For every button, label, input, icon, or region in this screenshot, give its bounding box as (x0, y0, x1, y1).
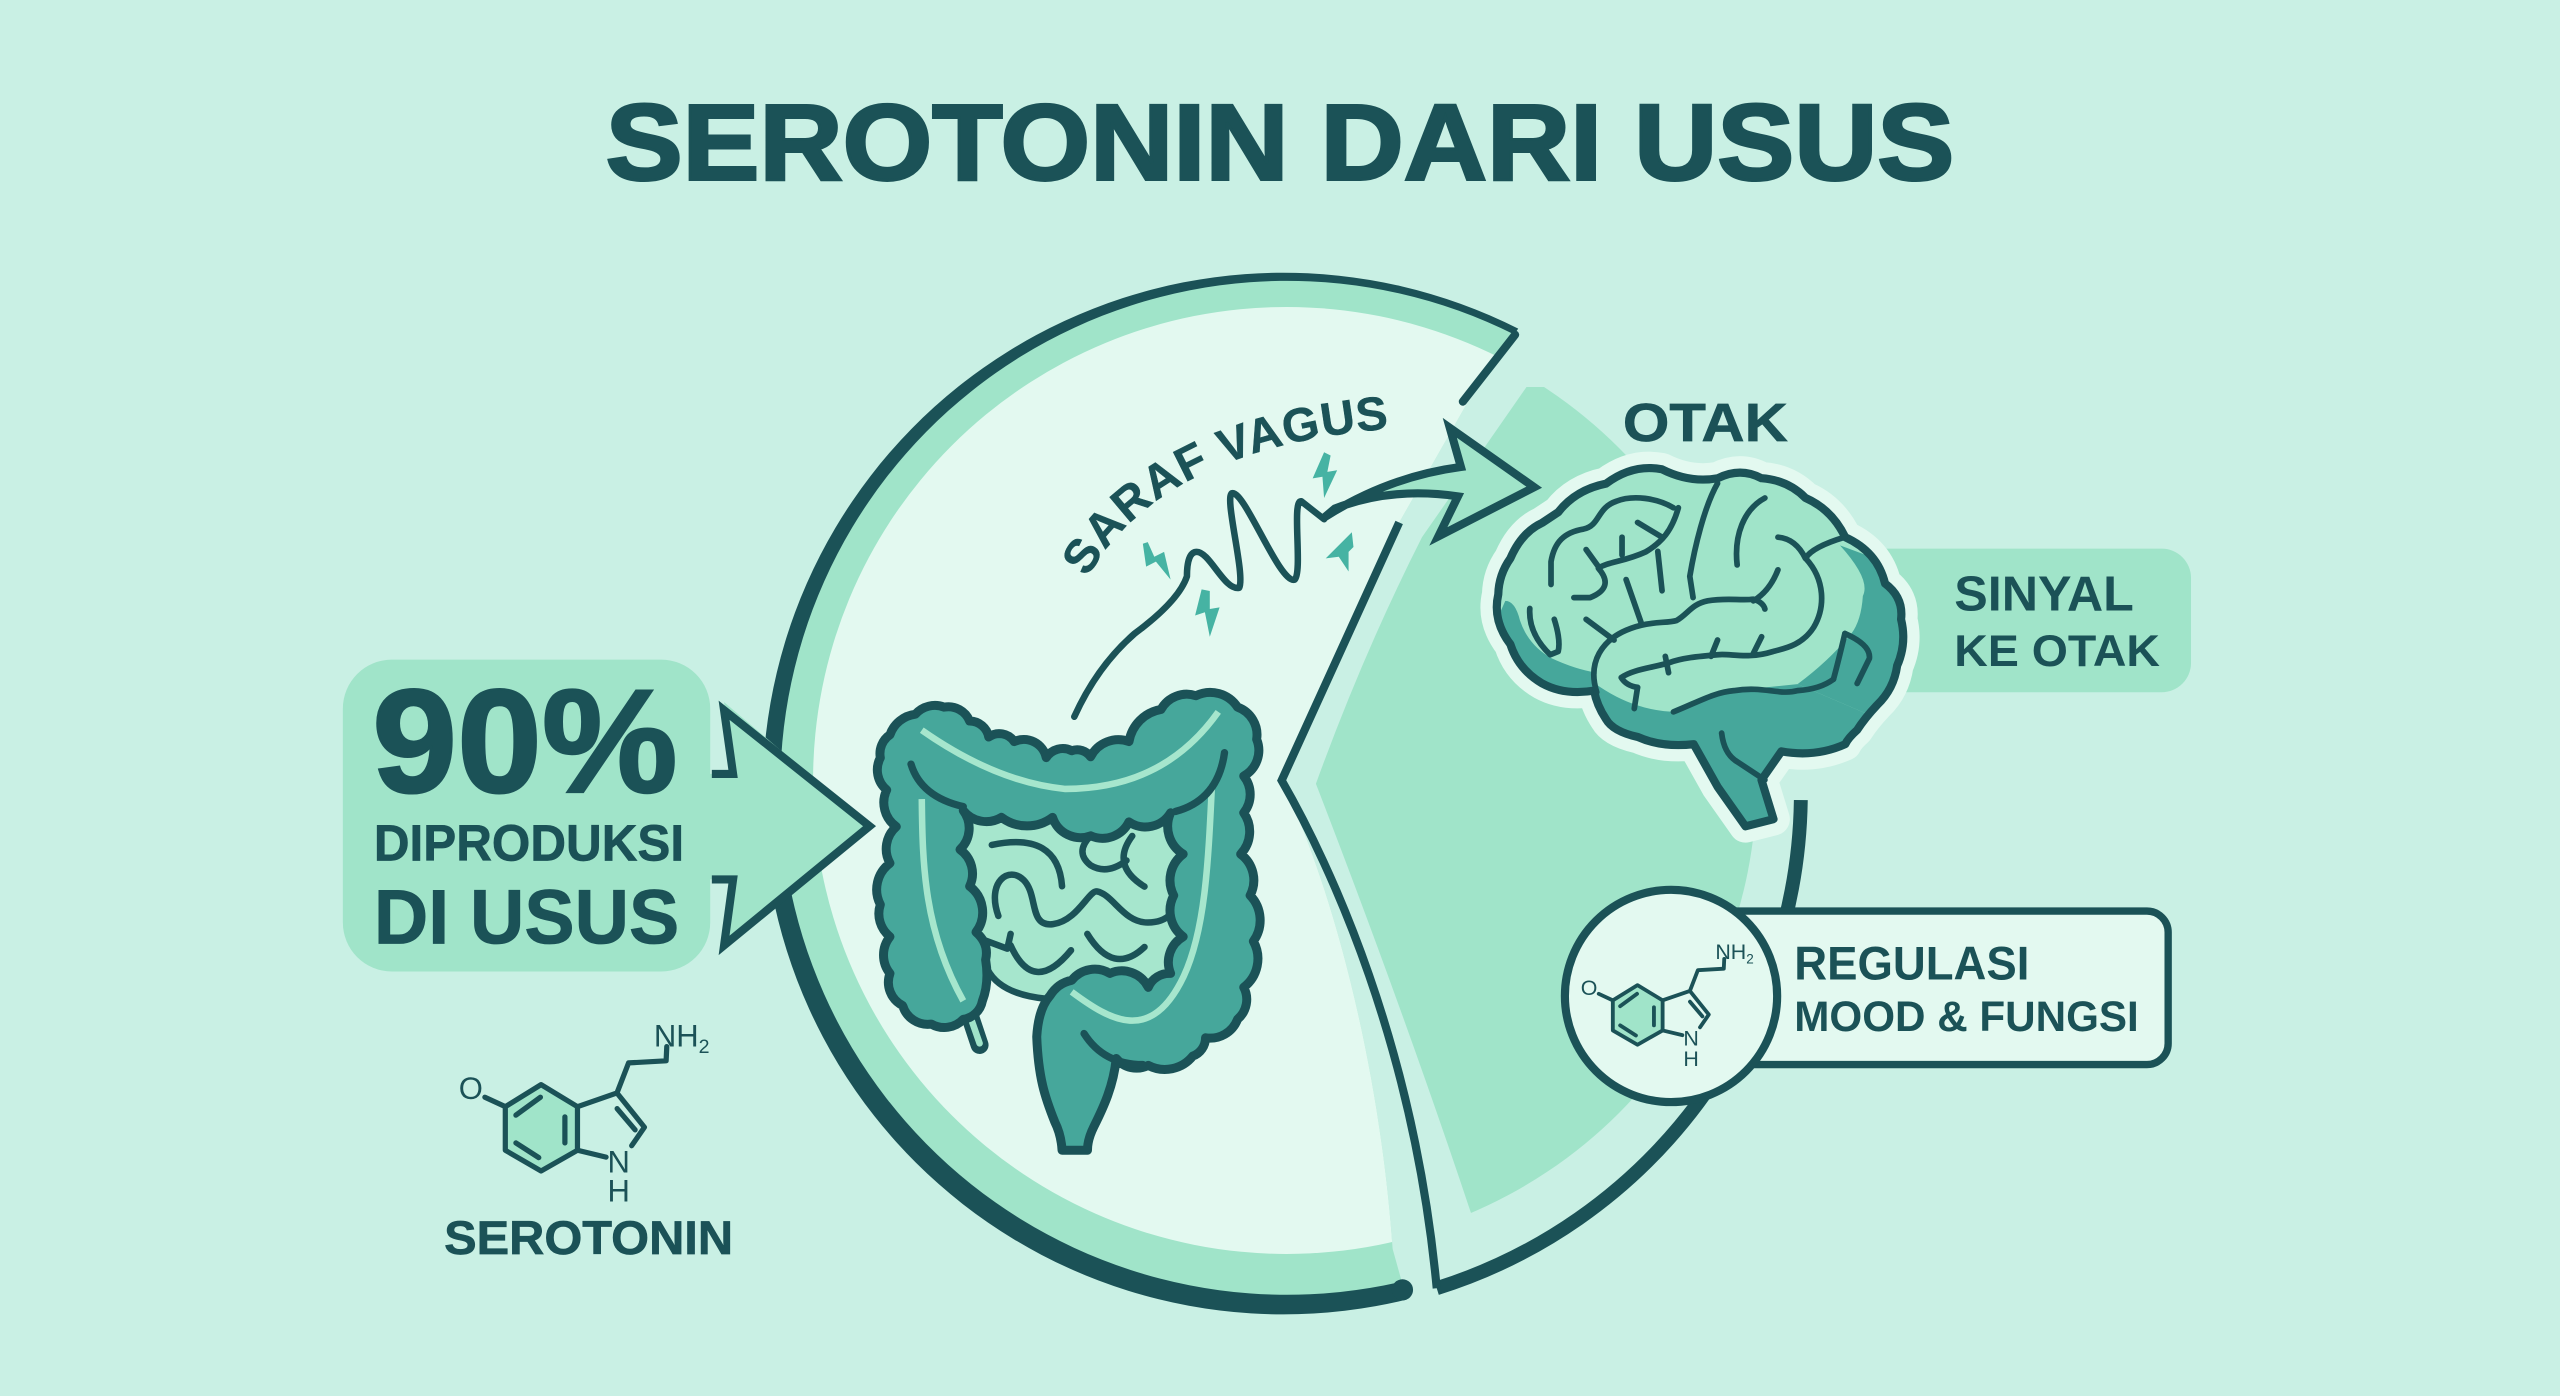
brain outline and folds (1497, 468, 1903, 826)
callout: regulasi mood dan fungsi: MOOD & FUNGSI (1794, 993, 2139, 1040)
panel: brain sector of the circle (1316, 387, 1808, 1295)
callout: sinyal ke otak: KE OTAK (1954, 627, 2160, 676)
label: serotonin: SEROTONIN (444, 1212, 733, 1265)
icon: serotonin molecule (459, 1019, 710, 1209)
brain halo (1497, 468, 1903, 826)
colon fold lines (911, 753, 1224, 1065)
icon: serotonin molecule: O (459, 1071, 483, 1106)
infographic canvas (342, 102, 2191, 1314)
icon: molecule badge: N (1683, 1027, 1699, 1051)
brain shading (1501, 546, 1900, 822)
icon: molecule badge: NH (1715, 940, 1746, 964)
callout: sinyal ke otak (1845, 549, 2191, 692)
callout: 90% produced in the gut: 90% (372, 660, 678, 824)
icon: molecule badge: H (1683, 1047, 1699, 1071)
label: otak: OTAK (1623, 393, 1788, 453)
icon: serotonin molecule: 2 (699, 1036, 710, 1058)
icon: molecule badge (1565, 890, 1777, 1102)
colon (877, 692, 1260, 1150)
icon: molecule badge: O (1581, 976, 1597, 1000)
icon: brain (1486, 468, 1918, 833)
callout: regulasi mood dan fungsi: REGULASI (1794, 938, 2029, 991)
icon: intestines (877, 692, 1260, 1150)
icon: serotonin molecule: NH (654, 1019, 699, 1054)
icon: vagus nerve signal (1074, 428, 1534, 717)
icon: serotonin molecule: H (608, 1174, 630, 1209)
arrow: into the gut (702, 702, 870, 950)
callout: 90% produced in the gut: DIPRODUKSI (374, 814, 684, 871)
callout: regulasi mood dan fungsi (1698, 911, 2168, 1065)
appendix (967, 1006, 980, 1045)
icon: serotonin molecule: N (608, 1144, 630, 1179)
callout: 90% produced in the gut: DI USUS (374, 876, 679, 961)
nerve line (1074, 493, 1324, 717)
panel: gut sector of the circle (766, 272, 1520, 1314)
callout: sinyal ke otak: SINYAL (1954, 568, 2134, 622)
colon highlight bands (922, 712, 1218, 1021)
callout: 90% produced in the gut (343, 660, 870, 971)
title: SEROTONIN DARI USUS (606, 82, 1954, 203)
label: saraf vagus: SARAF VAGUS (1064, 396, 1386, 573)
icon: molecule badge: 2 (1746, 951, 1754, 966)
brain fill (1497, 468, 1903, 826)
sparks (1143, 452, 1353, 637)
arrow to brain (1324, 428, 1534, 536)
small intestine (955, 800, 1192, 999)
